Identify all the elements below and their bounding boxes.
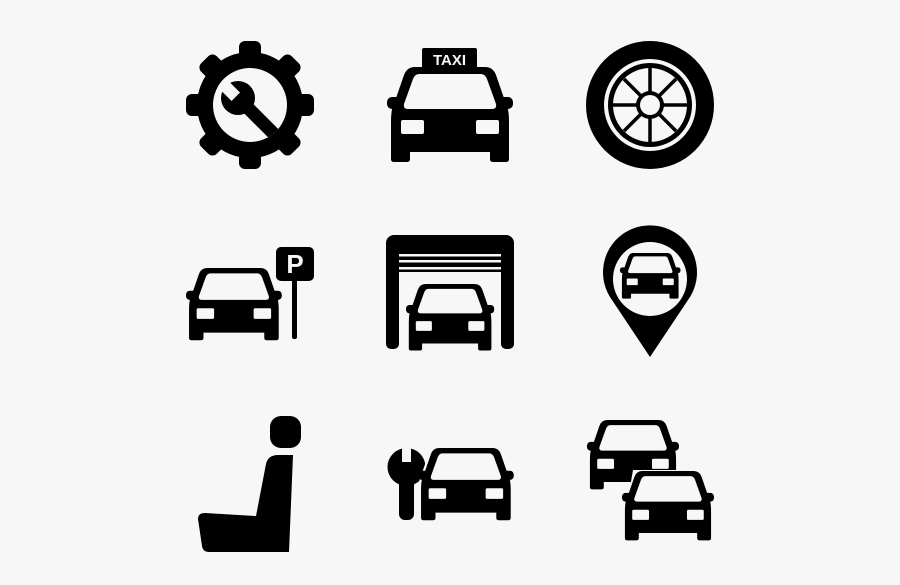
icon: car repair wrench (388, 440, 514, 520)
icon: tire (586, 41, 714, 169)
icon: taxi (387, 48, 513, 162)
icon: car seat (198, 416, 301, 552)
icon: gear with wrench (186, 41, 314, 169)
icon: garage (386, 235, 514, 350)
icon: taxi: TAXI (433, 52, 466, 69)
icon: location pin car (603, 225, 697, 357)
icon: parking car (186, 247, 314, 340)
icon: parking car: P (286, 249, 304, 279)
icon: traffic cars (587, 420, 715, 545)
